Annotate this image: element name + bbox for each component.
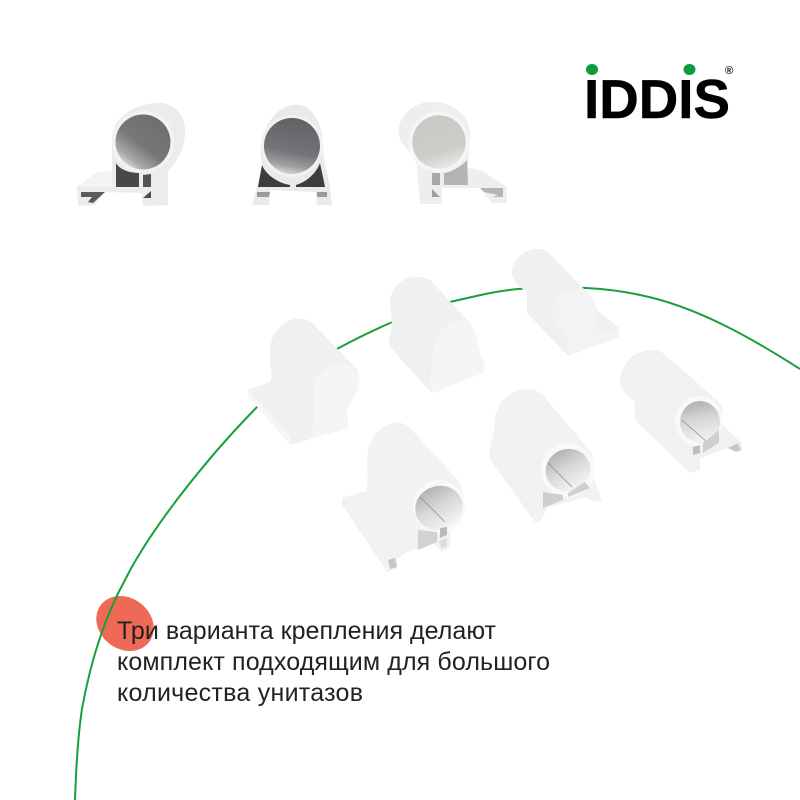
bracket 2: closed flared — [389, 277, 485, 393]
bracket 6: open flange right — [620, 350, 742, 473]
bracket 3: closed flange right — [512, 249, 619, 356]
caption text: Три варианта крепления делают — [117, 617, 497, 645]
logo dot right — [684, 64, 696, 75]
caption text: комплект подходящим для большого — [117, 648, 550, 676]
profile A: flange left — [77, 103, 185, 206]
bracket 5: open flared — [489, 389, 602, 522]
logo: IDDIS — [584, 64, 733, 130]
caption text: количества унитазов — [117, 679, 363, 707]
logo dot left — [586, 64, 598, 75]
bracket 4: open with flange — [342, 423, 469, 572]
bracket 1: closed with flange — [248, 319, 359, 445]
caption text — [117, 617, 550, 707]
logo wordmark: IDDIS — [584, 68, 730, 130]
green arc — [75, 287, 800, 800]
accent blob — [85, 585, 165, 662]
profile B: flared — [252, 105, 332, 205]
profile C: flange right — [399, 102, 507, 204]
registered mark: ® — [725, 65, 733, 77]
